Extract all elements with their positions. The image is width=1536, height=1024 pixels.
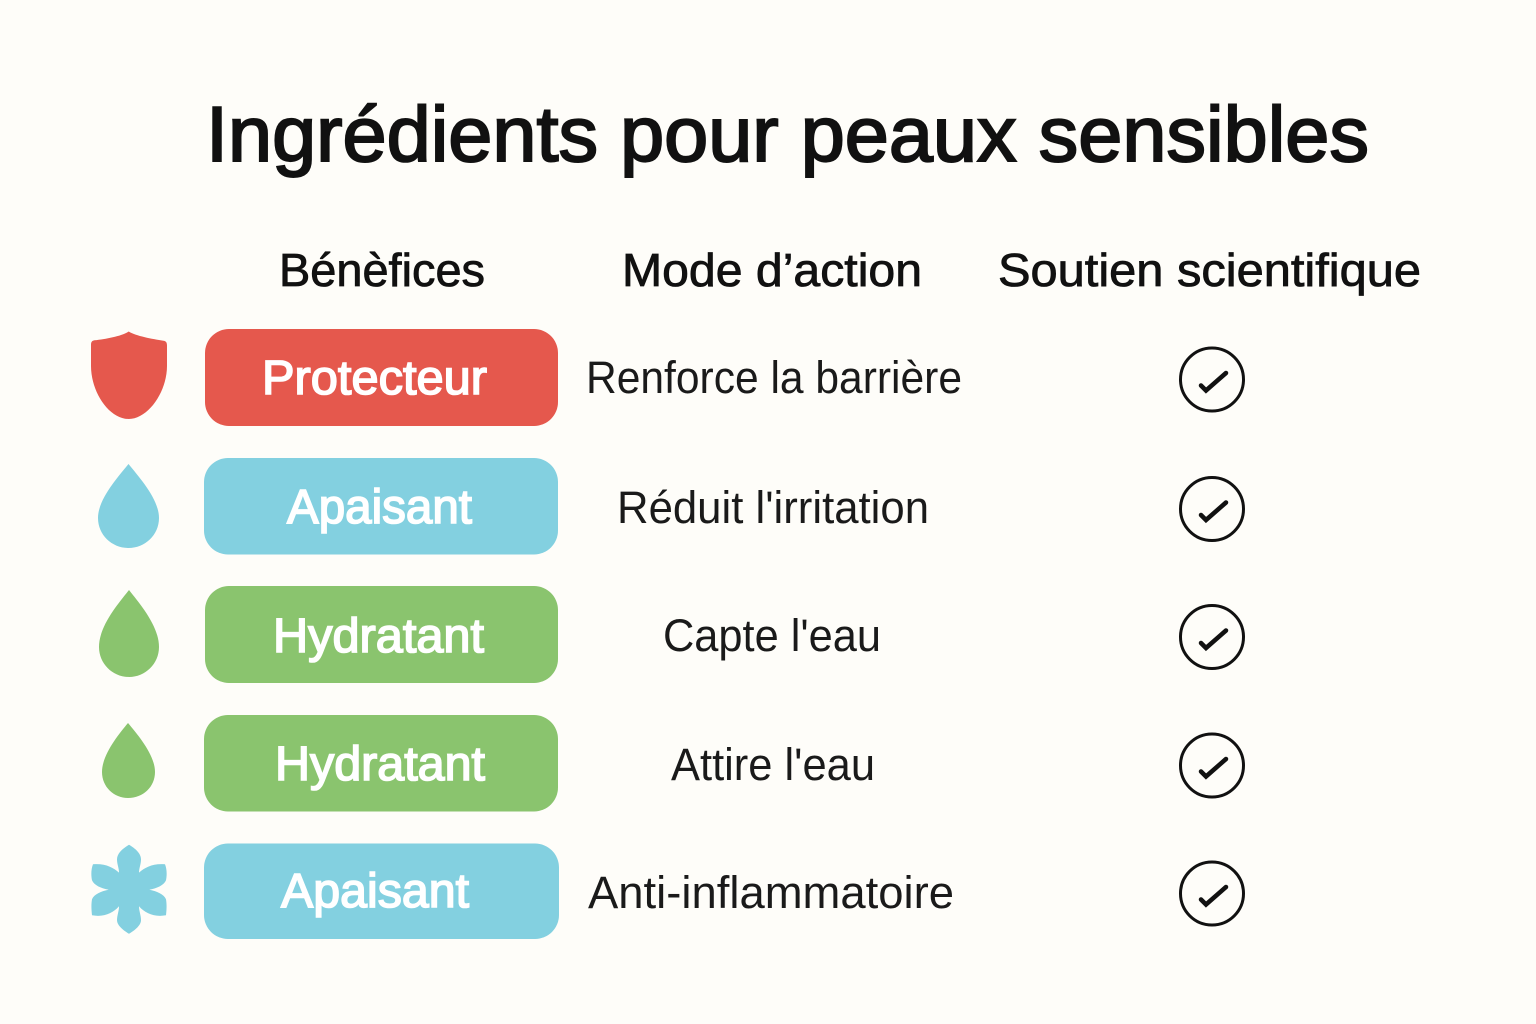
icon: flower (91, 845, 167, 934)
action text: Attire l'eau (671, 739, 875, 790)
icon: green drop (99, 590, 159, 677)
badge: protecteur (205, 329, 558, 426)
icon: shield (91, 332, 167, 419)
icon: check circle (1180, 478, 1244, 540)
title: Ingrédients pour peaux sensibles (206, 90, 1369, 178)
header: bénéfices: Bénèfices (279, 244, 485, 296)
action text: Renforce la barrière (586, 352, 962, 403)
action text: Capte l'eau (663, 610, 881, 661)
icon: check circle (1180, 862, 1244, 925)
icon: small green drop (102, 723, 155, 798)
icon: check circle (1180, 348, 1244, 411)
row 5: apaisant (91, 844, 1244, 939)
badge: hydratant: Hydratant (275, 738, 485, 791)
row 4: hydratant (102, 715, 1244, 812)
action text: Anti-inflammatoire (588, 867, 954, 918)
icon: check circle (1180, 606, 1244, 668)
icon: blue drop (98, 464, 159, 548)
icon: check circle (1180, 734, 1244, 797)
badge: apaisant (204, 844, 559, 939)
column headers (279, 244, 1421, 296)
action text: Réduit l'irritation (617, 482, 929, 533)
badge: hydratant: Hydratant (273, 610, 484, 663)
badge: apaisant: Apaisant (281, 865, 469, 918)
badge: protecteur: Protecteur (262, 352, 487, 405)
badge: apaisant (204, 458, 558, 554)
badge: hydratant (204, 715, 558, 812)
badge: hydratant (205, 586, 558, 683)
row 1: protecteur (91, 329, 1244, 426)
header: mode d'action: Mode d’action (622, 244, 922, 296)
header: soutien scientifique: Soutien scientifique (998, 244, 1421, 296)
badge: apaisant: Apaisant (287, 481, 472, 534)
row 3: hydratant (99, 586, 1244, 683)
row 2: apaisant (98, 458, 1244, 554)
